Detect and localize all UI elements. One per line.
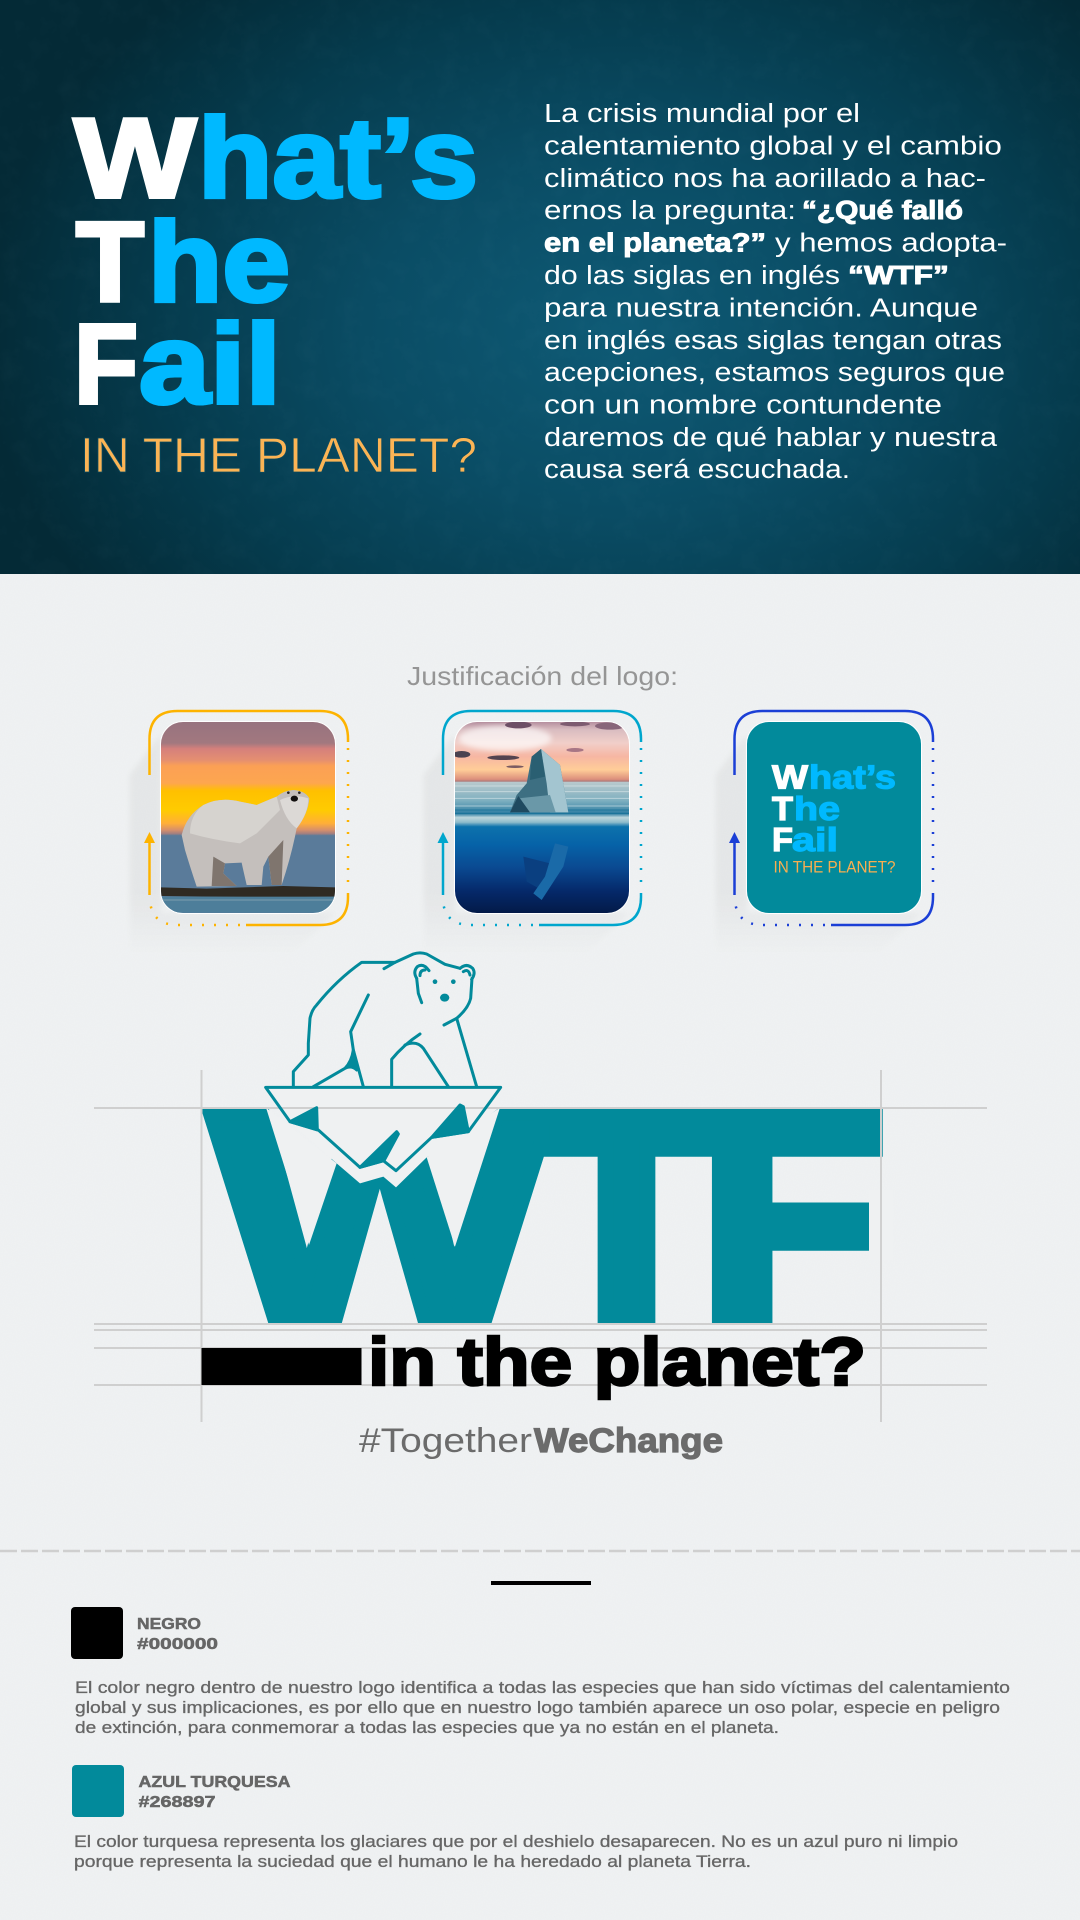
text: turquoise description: porque representa la suciedad que el humano le ha heredado al planeta Tierra. [74, 1853, 751, 1871]
photo: polar bear at sunset [161, 722, 336, 913]
panel: turquoise colour [72, 1765, 958, 1871]
frame: amber rounded outline [150, 711, 348, 925]
hashtag: #Together [359, 1422, 532, 1460]
label: black colour name [137, 1616, 218, 1653]
panel: polar bear card [132, 710, 350, 926]
arrow: amber up arrow [144, 832, 155, 895]
mini title: F [772, 821, 793, 858]
text: turquoise description [74, 1833, 958, 1871]
subtitle: in the planet: IN THE PLANET? [80, 429, 477, 483]
title: What's The Fail: ail [139, 301, 281, 427]
text: black description: El color negro dentro de nuestro logo identifica a todas las especies que han sido víctimas del calentamiento [75, 1679, 1010, 1697]
intro paragraph: climático nos ha aorillado a hac- [544, 165, 986, 193]
photo: iceberg above and below water [453, 722, 630, 913]
mini title: T [772, 790, 793, 827]
text: black description [75, 1679, 1010, 1737]
title: What's The Fail: W [74, 95, 196, 221]
swatch: turquoise [72, 1765, 124, 1817]
mini title: hat’s [809, 758, 896, 796]
hashtag: WeChange [534, 1422, 723, 1460]
mini title [772, 758, 896, 876]
panel: teal title card [716, 711, 933, 955]
intro paragraph: causa será escuchada. [544, 456, 850, 484]
title: What's The Fail [74, 95, 478, 427]
heading: logo justification: Justificación del logo: [407, 661, 678, 691]
label: turquoise colour name: AZUL TURQUESA [138, 1774, 290, 1791]
intro paragraph: acepciones, estamos seguros que [544, 359, 1005, 387]
logo: WTF with bear on iceberg [94, 953, 987, 1422]
intro paragraph: y hemos adopta- [775, 230, 1007, 258]
logo letters WTF [210, 1050, 886, 1381]
intro paragraph: do las siglas en inglés [544, 262, 840, 290]
label: turquoise colour name [138, 1774, 290, 1811]
mini title: he [794, 790, 840, 827]
mini title: IN THE PLANET? [774, 858, 896, 876]
logo letters WTF: F [700, 1054, 886, 1378]
short black rule [491, 1581, 591, 1585]
intro paragraph: calentamiento global y el cambio [544, 132, 1002, 160]
title: What's The Fail: T [76, 199, 144, 325]
mini title: W [772, 758, 809, 796]
arrow: cyan up arrow [438, 832, 448, 895]
title: What's The Fail: he [148, 199, 290, 325]
intro paragraph: La crisis mundial por el [544, 100, 860, 128]
text: black description: global y sus implicaciones, es por ello que en nuestro logo también aparece un oso polar, especie en peligro [75, 1699, 1000, 1717]
icon: polar bear on iceberg [266, 953, 501, 1247]
intro paragraph: “¿Qué falló [802, 197, 963, 225]
panel: black colour [71, 1607, 1010, 1737]
label: black colour name: #000000 [137, 1636, 218, 1653]
logo letters WTF: W [210, 1050, 553, 1381]
logo letters WTF: T [538, 1054, 715, 1378]
title: What's The Fail: F [74, 301, 138, 427]
hashtag [359, 1422, 723, 1460]
intro paragraph: para nuestra intención. Aunque [544, 294, 978, 322]
intro paragraph: daremos de qué hablar y nuestra [544, 424, 998, 452]
intro paragraph: en inglés esas siglas tengan otras [544, 327, 1002, 355]
F middle bar trim [869, 1190, 893, 1260]
arrow: blue up arrow [729, 832, 740, 895]
label: turquoise colour name: #268897 [138, 1794, 216, 1811]
frame: blue rounded outline [734, 711, 933, 925]
swatch: black [71, 1607, 123, 1659]
panel: header [0, 0, 1080, 574]
frame: cyan rounded outline [443, 711, 641, 925]
intro paragraph: “WTF” [848, 262, 949, 290]
text: black description: de extinción, para conmemorar a todas las especies que ya no están en el planeta. [75, 1719, 779, 1737]
intro paragraph: con un nombre contundente [544, 392, 942, 420]
text: turquoise description: El color turquesa representa los glaciares que por el deshielo desaparecen. No es un azul puro ni limpio [74, 1833, 958, 1851]
panel: iceberg card [426, 710, 642, 926]
intro paragraph: en el planeta?” [544, 230, 766, 258]
intro paragraph: ernos la pregunta: [544, 197, 796, 225]
tagline: in the planet?: in the planet? [368, 1324, 866, 1400]
black bar [202, 1348, 362, 1385]
label: black colour name: NEGRO [137, 1616, 201, 1633]
dashed divider [0, 1550, 1080, 1552]
title: What's The Fail: hat’s [198, 95, 478, 221]
guide lines [94, 1070, 987, 1422]
mini title: ail [792, 821, 838, 858]
intro paragraph [544, 100, 1007, 484]
